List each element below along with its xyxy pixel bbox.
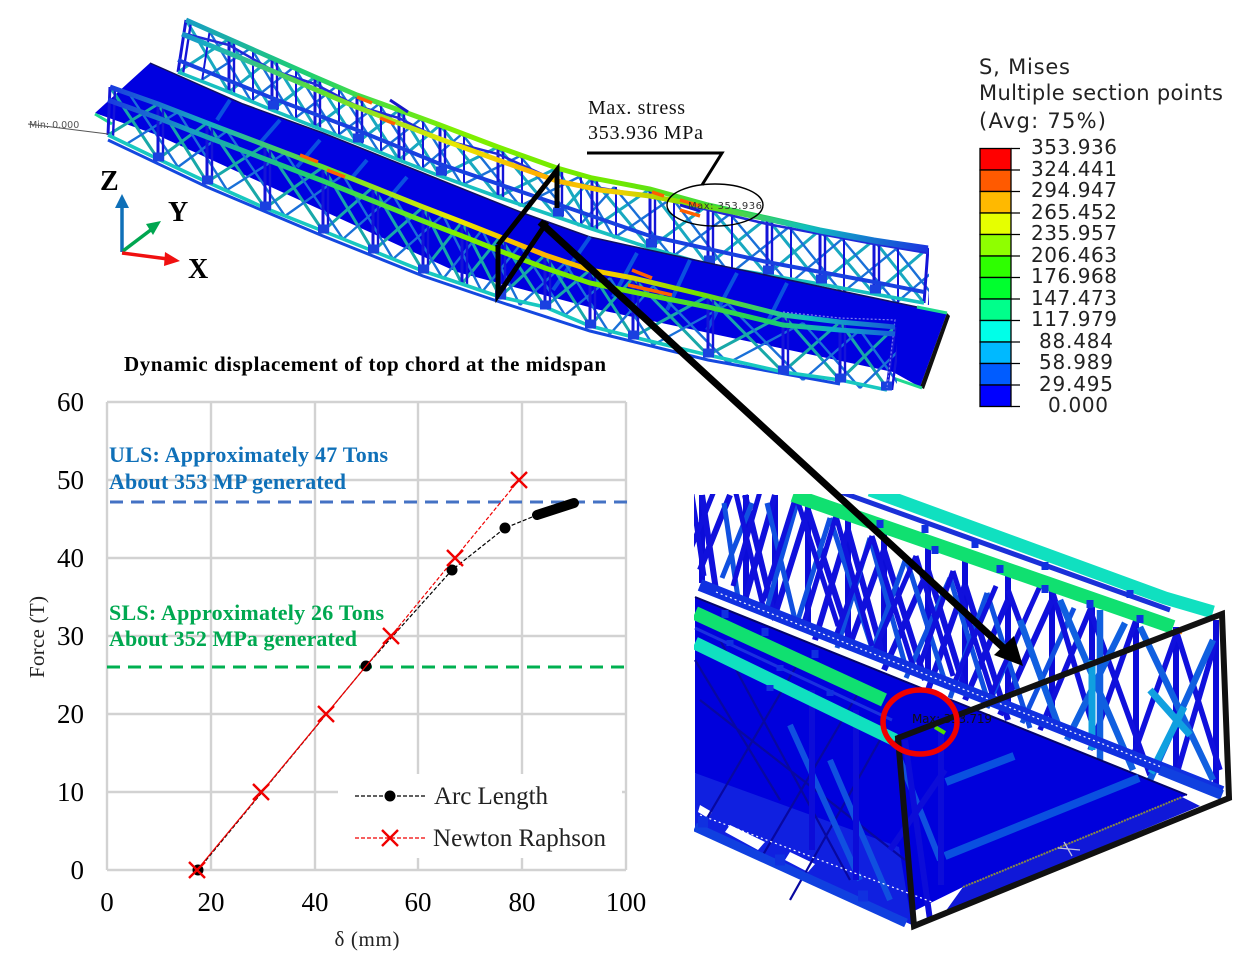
detail max label: Max: 353.719 [912,712,992,726]
colour bar values: 265.452 [1031,200,1117,224]
y axis labels: 10 [57,777,84,807]
legend: Mises stress colour scale [979,55,1223,417]
maximum stress callout: Max: 353.936 [688,201,762,212]
icon: XYZ axis triad [100,166,208,285]
arrow: section marker and pointer to detail [498,170,1023,666]
icon: XYZ axis triad: Y [168,197,188,228]
legend heading: S, Mises [979,55,1070,79]
near truss [108,87,915,396]
x axis labels: 60 [404,887,432,917]
icon: XYZ axis triad: X [188,254,208,285]
detail section frame [898,614,1229,926]
y axis labels: 30 [57,621,84,651]
colour bar values: 235.957 [1031,221,1117,245]
detail far truss lattice [688,481,1222,795]
x axis labels: 20 [198,887,224,917]
ULS annotation [109,442,388,494]
legend heading [979,55,1223,133]
x axis labels: 80 [508,887,536,917]
panel: overall bridge stress contour [28,20,952,396]
SLS reference line [107,666,624,668]
legend heading: (Avg: 75%) [979,109,1106,133]
x axis title: δ (mm) [334,927,400,951]
series: Newton Raphson [189,472,527,878]
y axis title: Force (T) [25,596,49,678]
far truss [178,20,952,312]
detail deck [695,597,1200,915]
ULS reference line [110,500,629,504]
x axis labels [100,887,646,917]
colour bar values: 294.947 [1031,178,1117,202]
chart legend: Arc Length [434,783,548,810]
colour bar values: 0.000 [1048,393,1108,417]
SLS annotation: SLS: Approximately 26 Tons [109,600,384,625]
colour bar values: 324.441 [1031,157,1117,181]
colour bar [980,148,1020,406]
ULS annotation: ULS: Approximately 47 Tons [109,442,388,467]
maximum stress callout [587,97,763,226]
minimum label: Min: 0.000 [29,120,79,131]
line chart: force versus displacement [25,387,646,951]
colour bar values: 29.495 [1039,372,1113,396]
maximum stress callout: 353.936 MPa [588,122,703,144]
chart legend: Newton Raphson [433,825,606,852]
icon: XYZ axis triad: Z [100,166,119,197]
x axis labels: 0 [100,887,114,917]
colour bar values: 88.484 [1039,329,1113,353]
chart legend [338,774,622,858]
SLS annotation [109,600,384,651]
bridge deck [95,63,950,389]
y axis labels: 40 [57,543,84,573]
SLS annotation: About 352 MPa generated [109,626,357,651]
ULS annotation: About 353 MP generated [109,469,346,494]
colour bar values: 58.989 [1039,350,1113,374]
chart title: Dynamic displacement of top chord at the midspan [124,352,606,376]
colour bar values [1031,135,1117,417]
colour bar values: 117.979 [1031,307,1117,331]
panel: midspan detail view [688,481,1229,926]
colour bar values: 353.936 [1031,135,1117,159]
red circle highlight [883,690,957,754]
maximum stress callout: Max. stress [588,97,685,119]
legend heading: Multiple section points [979,81,1223,105]
x axis labels: 100 [606,887,646,917]
colour bar values: 176.968 [1031,264,1117,288]
y axis labels [57,387,84,885]
x axis labels: 40 [302,887,328,917]
detail near truss [695,610,945,925]
colour bar values: 206.463 [1031,243,1117,267]
y axis labels: 60 [57,387,84,417]
series: Arc Length [192,503,574,876]
y axis labels: 0 [70,855,84,885]
chart grid [107,402,626,870]
y axis labels: 20 [57,699,84,729]
colour bar values: 147.473 [1031,286,1117,310]
detail far top chords [793,490,1213,633]
y axis labels: 50 [57,465,84,495]
minimum label [28,120,108,134]
